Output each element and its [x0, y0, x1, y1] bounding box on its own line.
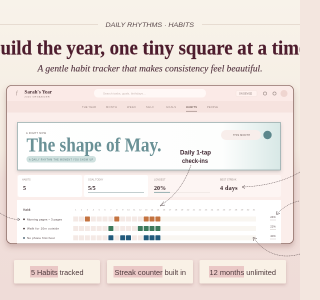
- stats row: [17, 175, 281, 197]
- day numbers: 21: [193, 210, 196, 212]
- day numbers: 17: [169, 210, 172, 212]
- arrow: check-ins to grid: [160, 165, 191, 206]
- day numbers: 9: [122, 210, 124, 212]
- hero eyebrow: A RIGHT NOW: [26, 132, 47, 135]
- app name: Sarah's Year: [24, 90, 53, 96]
- navigation band: HABITS: [186, 105, 197, 109]
- day numbers: 3: [87, 210, 89, 212]
- day numbers: 15: [157, 210, 160, 212]
- day numbers: 1: [75, 210, 77, 212]
- empty day cells: [73, 216, 143, 240]
- day numbers: 18: [175, 210, 178, 212]
- arrow: to percent column: [276, 201, 299, 214]
- device chip and icons: [236, 90, 288, 97]
- app window: [6, 86, 294, 244]
- hero pill: A DAILY RHYTHM THE MOMENT YOU SHOW UP: [29, 158, 93, 161]
- grid header: Habit: [23, 208, 31, 212]
- percent column: 40%: [270, 234, 276, 238]
- search box: Search tasks, goals, birthdays…: [103, 92, 146, 96]
- day numbers: 14: [151, 210, 154, 212]
- day numbers: 29: [241, 210, 244, 212]
- month selector: [221, 130, 261, 140]
- chip: 12 months unlimited: [200, 260, 286, 284]
- day numbers: 25: [217, 210, 220, 212]
- navigation band: SELF: [146, 105, 154, 109]
- stat: longest: [154, 178, 210, 192]
- subtitle: A gentle habit tracker that makes consistency feel beautiful.: [37, 64, 263, 74]
- day numbers: 30: [247, 210, 250, 212]
- device chip and icons: ON DEVICE: [239, 93, 253, 96]
- day numbers: 12: [139, 210, 142, 212]
- day numbers: 5: [99, 210, 101, 212]
- blue check-ins: [108, 235, 160, 240]
- search box: [94, 89, 206, 98]
- habit labels: Walk for 10m outside: [27, 227, 59, 231]
- habit labels: Morning pages ~ 3 pages: [27, 217, 62, 221]
- arrow: to month grid: [253, 238, 300, 256]
- day numbers: 7: [110, 210, 112, 212]
- top bar: [7, 86, 293, 101]
- percent column: 24%: [270, 215, 276, 219]
- navigation band: WEEK: [127, 105, 136, 109]
- hero title: The shape of May.: [26, 134, 162, 156]
- app name: 2026 ORGANIZER: [24, 96, 50, 98]
- day numbers: 6: [104, 210, 106, 212]
- day numbers: 10: [127, 210, 130, 212]
- day numbers: 27: [229, 210, 232, 212]
- callout: daily check-ins: [180, 150, 211, 165]
- day numbers: 23: [205, 210, 208, 212]
- arrow: to best streak: [242, 172, 300, 188]
- chip: 5 habits tracked: [14, 260, 100, 284]
- day numbers: 31: [253, 210, 256, 212]
- hero pill: [26, 156, 96, 162]
- day numbers: 4: [93, 210, 95, 212]
- stat: longest: LONGEST: [154, 178, 166, 182]
- stat: goal today: [84, 175, 148, 197]
- add button: [263, 131, 272, 139]
- stat: best streak: 4 days: [220, 185, 238, 192]
- day numbers: 24: [211, 210, 214, 212]
- hero panel: [18, 122, 280, 170]
- day numbers: 13: [145, 210, 148, 212]
- chip: 12 months unlimited: 12 months unlimited: [210, 268, 276, 277]
- stat: habits: 5: [23, 186, 26, 192]
- pale future cells: [161, 216, 256, 240]
- habit grid panel: [17, 200, 281, 244]
- day numbers: 16: [163, 210, 166, 212]
- chip: 5 habits tracked: 5 Habits tracked: [31, 268, 84, 277]
- habit labels: No phone first hour: [27, 236, 55, 240]
- day numbers: 19: [181, 210, 184, 212]
- day numbers: 22: [199, 210, 202, 212]
- day numbers: 11: [133, 210, 136, 212]
- day numbers: 8: [116, 210, 118, 212]
- day numbers: 2: [81, 210, 83, 212]
- callout: daily check-ins: Daily 1-tap: [180, 150, 211, 156]
- stat: best streak: [220, 178, 238, 192]
- stat: longest: 20%: [154, 186, 166, 192]
- percent column: 22%: [270, 224, 276, 228]
- chip: streak counter: [107, 260, 193, 284]
- orange check-ins: [85, 216, 160, 222]
- stat: habits: HABITS: [22, 178, 31, 182]
- habit labels: [23, 217, 63, 240]
- navigation band: PEOPLE: [207, 105, 218, 109]
- stat: goal today: GOAL TODAY: [88, 178, 104, 182]
- month selector: THIS MONTH: [233, 134, 250, 137]
- navigation band: [7, 101, 293, 112]
- callout: daily check-ins: check-ins: [182, 158, 209, 165]
- navigation band: GOALS: [166, 105, 176, 109]
- chip: streak counter: Streak counter built in: [114, 268, 186, 277]
- percent column: [270, 215, 276, 239]
- stat: best streak: BEST STREAK: [220, 178, 237, 182]
- eyebrow heading: DAILY RHYTHMS · HABITS: [106, 22, 195, 29]
- app name: [16, 90, 53, 98]
- day numbers: 26: [223, 210, 226, 212]
- stat: habits: [18, 175, 82, 197]
- stat: goal today: 5/5: [88, 186, 96, 192]
- day numbers: 20: [187, 210, 190, 212]
- navigation band: THE YEAR: [82, 105, 96, 109]
- app name: f: [16, 92, 18, 96]
- navigation band: MONTH: [106, 105, 117, 109]
- day numbers: 28: [235, 210, 238, 212]
- green check-ins: [108, 226, 160, 231]
- day numbers: [75, 210, 256, 212]
- arrow: to habit labels: [0, 213, 20, 221]
